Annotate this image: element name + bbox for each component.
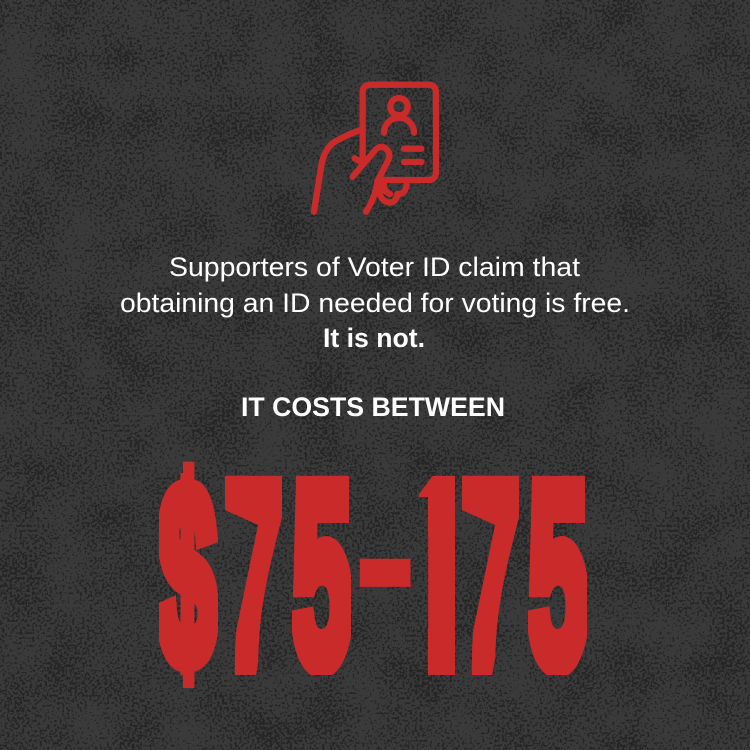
text block: claim: Supporters of Voter ID claim that — [169, 252, 581, 282]
big number: cost range: 5 — [292, 431, 352, 721]
text block: claim — [120, 252, 630, 353]
icon: hand holding ID card — [314, 85, 436, 212]
big number: cost range: $ — [158, 432, 216, 721]
big number: cost range: 1 — [404, 430, 474, 721]
big number: cost range: 7 — [224, 432, 282, 721]
big number: cost range — [159, 462, 587, 688]
big number: cost range: 7 — [461, 432, 519, 721]
heading: it costs between: IT COSTS BETWEEN — [241, 392, 505, 422]
big number: cost range: 5 — [528, 431, 588, 721]
text block: claim: It is not. — [323, 323, 425, 353]
big number: cost range: - — [352, 421, 419, 685]
text block: claim: obtaining an ID needed for voting is free. — [120, 288, 630, 318]
